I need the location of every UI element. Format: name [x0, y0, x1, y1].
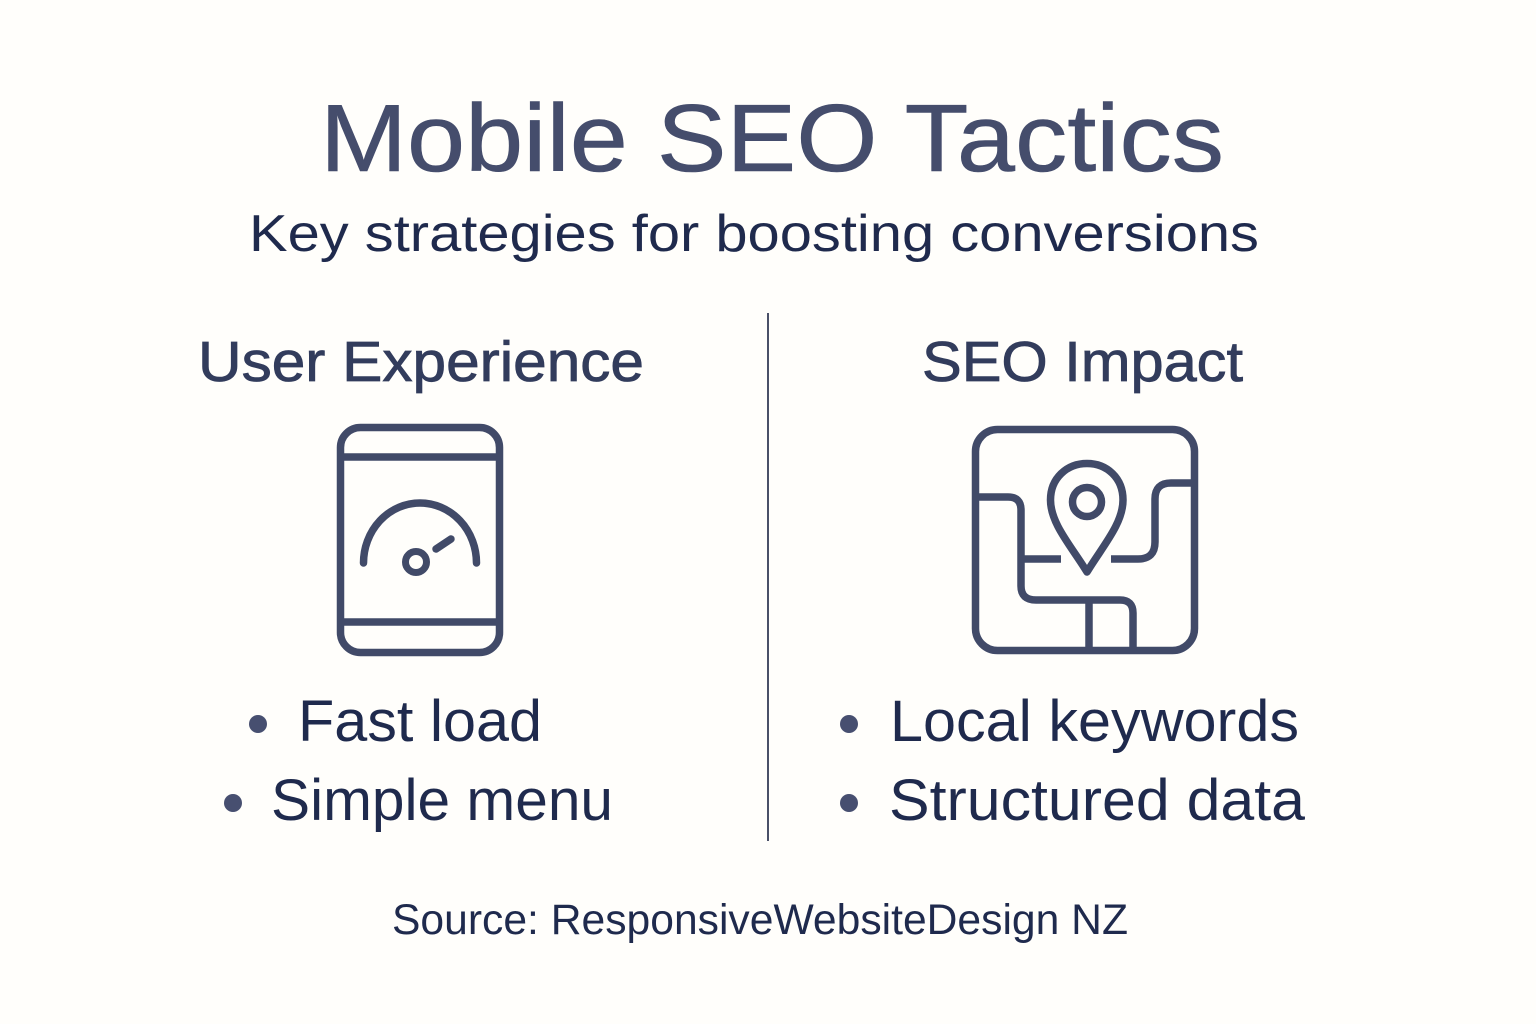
heading: seo impact: SEO Impact — [922, 330, 1243, 394]
panel: user experience — [198, 330, 644, 833]
subtitle: Key strategies for boosting conversions — [249, 205, 1259, 263]
title: Mobile SEO Tactics — [320, 85, 1224, 192]
bullet list: user experience — [224, 689, 613, 833]
bullet: local keywords: Local keywords — [890, 689, 1299, 754]
heading: user experience: User Experience — [198, 330, 644, 394]
icon: phone with speedometer — [340, 428, 500, 652]
icon: map with location pin — [976, 430, 1195, 651]
bullet: simple menu: Simple menu — [271, 768, 613, 833]
panel: seo impact — [840, 330, 1306, 833]
source line: Source: ResponsiveWebsiteDesign NZ — [392, 896, 1128, 944]
bullet: fast load: Fast load — [298, 689, 542, 754]
bullet: structured data: Structured data — [889, 768, 1306, 833]
bullet list: seo impact — [840, 689, 1306, 833]
